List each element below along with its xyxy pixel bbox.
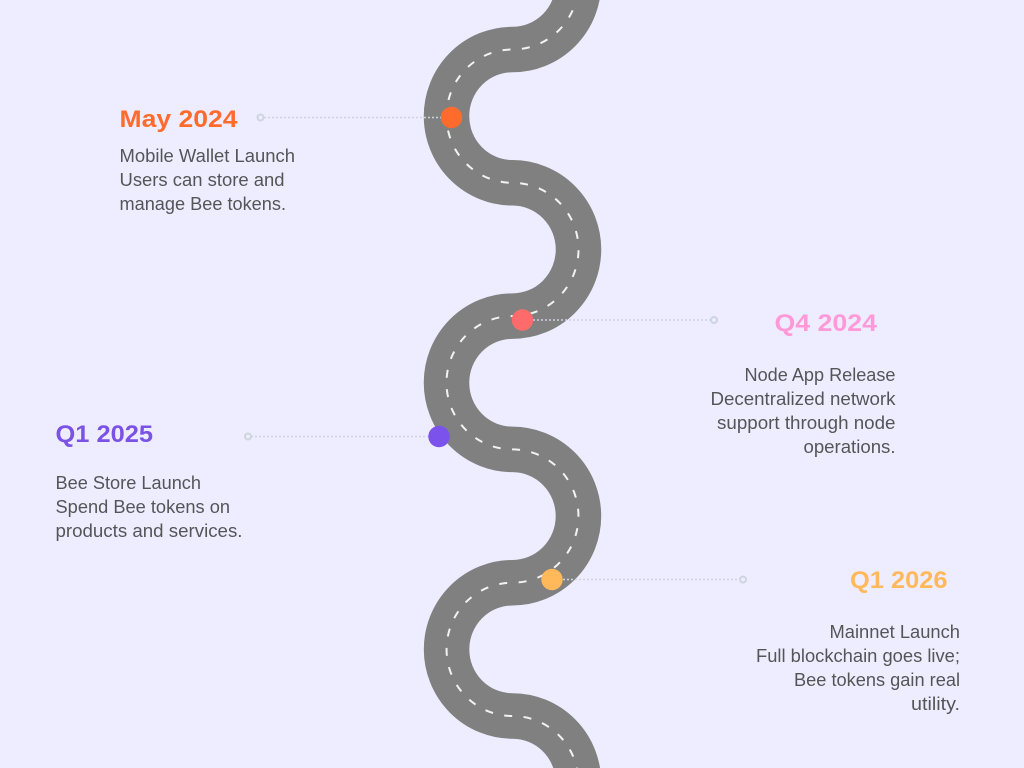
description: Q1 2026: Bee tokens gain real [794, 670, 960, 690]
connector: Q1 2026 [563, 576, 746, 582]
winding road [447, 0, 578, 768]
description: Q1 2026: Full blockchain goes live; [756, 646, 960, 666]
marker: Q4 2024 [512, 309, 533, 331]
heading: Q1 2026: Q1 2026 [850, 567, 948, 594]
description: Q1 2026: Mainnet Launch [830, 622, 960, 642]
heading: Q4 2024: Q4 2024 [774, 310, 878, 337]
connector: Q4 2024 [533, 317, 717, 323]
description: Q4 2024: support through node [717, 413, 896, 433]
milestone: Q4 2024 [512, 309, 897, 457]
description: Q4 2024 [710, 365, 897, 457]
description: Q4 2024: Decentralized network [710, 389, 897, 409]
description: May 2024: Users can store and [120, 170, 284, 190]
connector: May 2024 [258, 114, 445, 120]
description: Q1 2026 [756, 622, 960, 714]
heading: May 2024: May 2024 [120, 106, 238, 133]
connector: Q1 2025 [245, 434, 430, 440]
description: Q1 2025: products and services. [56, 521, 242, 541]
marker: May 2024 [441, 107, 462, 128]
description: Q4 2024: Node App Release [744, 365, 896, 385]
marker: Q1 2026 [541, 569, 563, 590]
description: May 2024 [120, 146, 295, 214]
description: Q1 2025: Spend Bee tokens on [56, 497, 230, 517]
heading: Q1 2025: Q1 2025 [56, 421, 153, 448]
description: Q1 2025: Bee Store Launch [56, 473, 201, 493]
description: Q4 2024: operations. [804, 437, 896, 457]
description: Q1 2026: utility. [911, 694, 960, 714]
marker: Q1 2025 [428, 426, 450, 447]
milestone: Q1 2026 [541, 567, 960, 714]
description: May 2024: Mobile Wallet Launch [120, 146, 295, 166]
description: May 2024: manage Bee tokens. [120, 194, 286, 214]
description: Q1 2025 [56, 473, 242, 541]
milestone: Q1 2025 [56, 421, 450, 541]
milestone: May 2024 [120, 106, 462, 214]
